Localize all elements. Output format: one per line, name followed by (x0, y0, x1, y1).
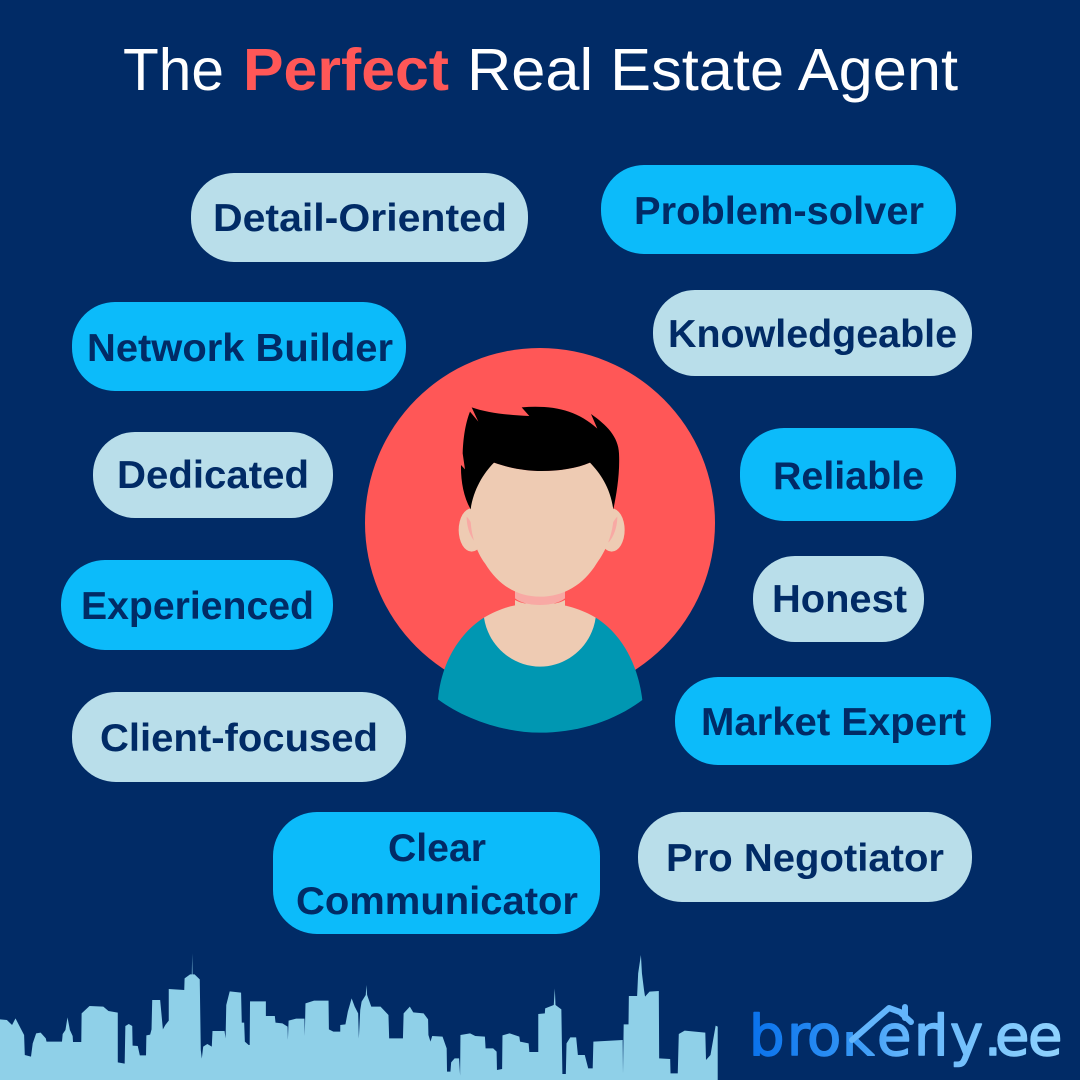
pill: Client-focused (72, 692, 406, 782)
pill: Reliable: Reliable (773, 455, 924, 498)
pill: Pro Negotiator: Pro Negotiator (666, 837, 944, 880)
pill: Honest: Honest (772, 578, 907, 621)
pill: Market Expert: Market Expert (701, 701, 966, 744)
red circle (365, 348, 715, 698)
pill: Clear Communicator: Clear (388, 827, 486, 870)
pill: Client-focused: Client-focused (100, 717, 378, 760)
pill: Problem-solver (601, 165, 956, 254)
pill: Dedicated (93, 432, 333, 518)
pill: Reliable (740, 428, 956, 521)
pill: Experienced (61, 560, 333, 650)
pill: Detail-Oriented (191, 173, 528, 262)
pill: Knowledgeable: Knowledgeable (668, 313, 957, 356)
title: The (123, 37, 224, 103)
pill: Experienced: Experienced (81, 585, 314, 628)
pill: Detail-Oriented: Detail-Oriented (213, 197, 507, 240)
title (123, 37, 958, 103)
pill: Problem-solver: Problem-solver (634, 190, 924, 233)
pill: Knowledgeable (653, 290, 972, 376)
pill: Honest (753, 556, 924, 642)
icon: faceless agent avatar (438, 407, 642, 733)
icon: logo roof (852, 1007, 911, 1040)
pill: Pro Negotiator (638, 812, 972, 902)
pill: Dedicated: Dedicated (117, 454, 309, 497)
title: Real Estate Agent (467, 37, 958, 103)
pill: Clear Communicator (273, 812, 600, 934)
pill: Market Expert (675, 677, 991, 765)
pill: Network Builder (72, 302, 406, 391)
logo: brokerly.ee: brokerly.ee (749, 1004, 1062, 1069)
skyline (0, 953, 718, 1080)
title: Perfect (243, 37, 449, 103)
pill: Clear Communicator: Communicator (296, 880, 578, 923)
pill: Network Builder: Network Builder (87, 327, 393, 370)
